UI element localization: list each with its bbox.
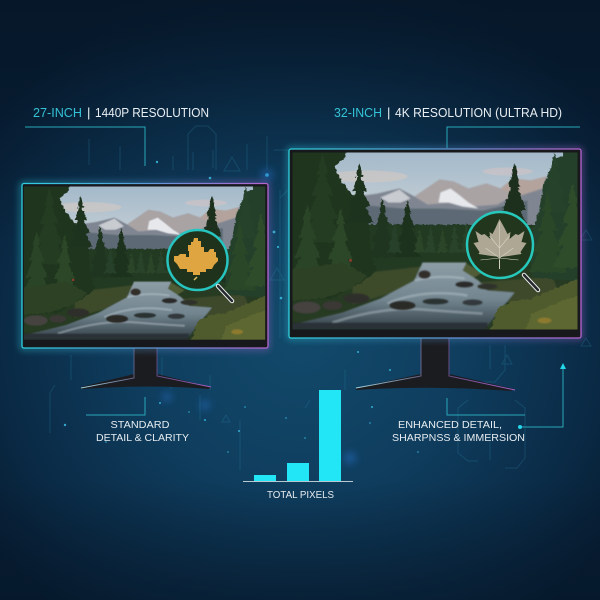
monitor glow right: [289, 149, 581, 338]
heading: 27-inch 1440p resolution: [33, 105, 209, 120]
magnifier with detailed leaf: [467, 212, 538, 290]
heading: 32-inch 4K resolution: |: [387, 105, 390, 120]
photo: forest river left: [7, 169, 282, 355]
monitor stand right: [356, 338, 515, 391]
detailed maple leaf: [474, 219, 526, 269]
decorative circuit traces: [50, 126, 592, 470]
connector: right caption: [447, 398, 525, 415]
heading: 27-inch 1440p resolution: |: [87, 105, 90, 120]
heading: 27-inch 1440p resolution: 27-INCH: [33, 105, 82, 120]
monitor stand left: [81, 348, 211, 389]
heading: 32-inch 4K resolution: 32-INCH: [334, 105, 382, 120]
caption: standard detail: DETAIL & CLARITY: [96, 432, 189, 444]
arrow: enhanced caption upward: [518, 363, 566, 429]
pixelated orange leaf: [174, 238, 218, 275]
monitor frame right: [289, 149, 581, 338]
connector: right heading to monitor: [447, 127, 580, 148]
chart label: TOTAL PIXELS: [267, 490, 334, 501]
caption: enhanced detail: [392, 419, 525, 444]
heading: 32-inch 4K resolution: [334, 105, 562, 120]
heading: 27-inch 1440p resolution: 1440P RESOLUTION: [95, 105, 209, 120]
decorative bokeh: [162, 169, 356, 464]
connector: left heading to monitor: [25, 127, 145, 166]
monitor glow left: [22, 184, 268, 348]
photo: forest river right: [272, 132, 598, 348]
monitor: 27-inch: [7, 169, 282, 389]
heading: 32-inch 4K resolution: 4K RESOLUTION (ULTRA HD): [395, 105, 562, 120]
monitor frame left: [22, 184, 268, 348]
magnifier with pixelated leaf: [168, 230, 232, 301]
caption: enhanced detail: ENHANCED DETAIL,: [398, 419, 502, 431]
caption: standard detail: [96, 419, 189, 444]
caption: standard detail: STANDARD: [110, 419, 170, 431]
monitor: 32-inch: [272, 132, 598, 391]
connector: left caption: [86, 397, 145, 415]
caption: enhanced detail: SHARPNSS & IMMERSION: [392, 432, 525, 444]
bar chart: total pixels: [243, 390, 353, 501]
